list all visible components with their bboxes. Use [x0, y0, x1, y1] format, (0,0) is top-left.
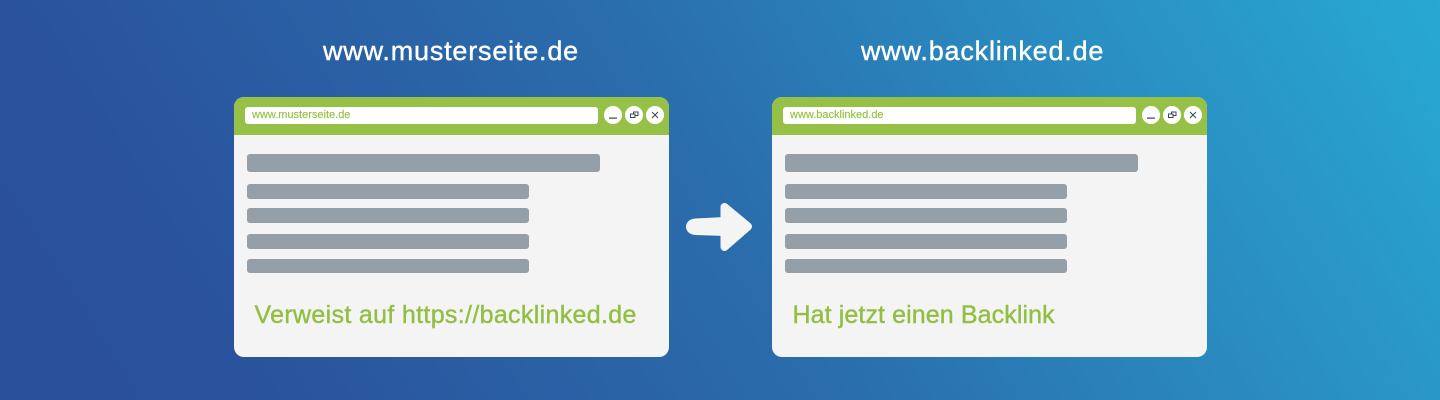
placeholder text line 4	[247, 258, 529, 273]
address bar	[245, 106, 598, 124]
address bar: www.musterseite.de	[252, 108, 350, 120]
placeholder text line 1	[785, 184, 1067, 198]
panel: target browser window	[772, 96, 1206, 356]
icon: close button	[646, 106, 664, 124]
icon: close button	[1184, 106, 1202, 124]
placeholder headline line	[247, 154, 600, 172]
placeholder text line 2	[785, 208, 1067, 222]
link message: Verweist auf https://backlinked.de	[254, 301, 637, 329]
panel: source browser window	[234, 96, 668, 356]
heading: source site: www.musterseite.de	[323, 36, 579, 66]
placeholder text line 4	[785, 258, 1067, 273]
icon: restore button	[625, 106, 643, 124]
address bar	[783, 106, 1136, 124]
browser title bar	[772, 96, 1206, 134]
placeholder text line 3	[785, 234, 1067, 248]
heading: target site: www.backlinked.de	[861, 36, 1104, 66]
backlink message: Hat jetzt einen Backlink	[792, 301, 1055, 329]
browser title bar	[234, 96, 668, 134]
address bar: www.backlinked.de	[790, 108, 884, 120]
icon: restore button	[1163, 106, 1181, 124]
placeholder headline line	[785, 154, 1138, 172]
icon: arrow between windows	[686, 203, 752, 251]
placeholder text line 1	[247, 184, 529, 198]
icon: minimize button	[604, 106, 622, 124]
placeholder text line 3	[247, 234, 529, 248]
icon: minimize button	[1142, 106, 1160, 124]
placeholder text line 2	[247, 208, 529, 222]
